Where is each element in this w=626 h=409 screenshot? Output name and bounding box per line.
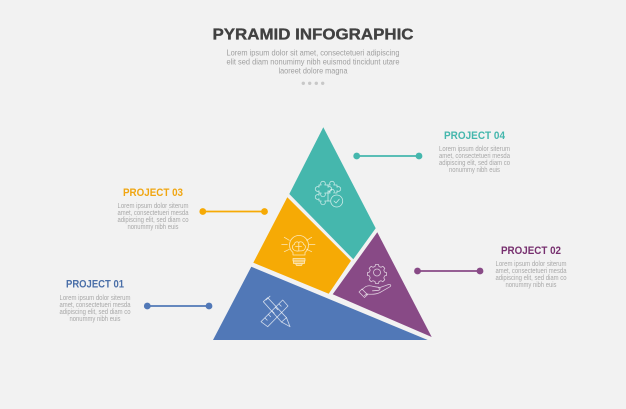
text block: project 03: nonummy nibh euis	[128, 224, 179, 231]
pyramid segment: teal	[289, 127, 376, 259]
text block: project 02	[496, 245, 567, 289]
pyramid segment: purple	[333, 232, 432, 337]
text block: project 04: Lorem ipsum dolor siterum	[439, 146, 510, 153]
text block: project 02: Lorem ipsum dolor siterum	[496, 261, 567, 268]
text block: project 03	[118, 187, 189, 231]
text block: project 03: amet, consectetueri mesda	[118, 210, 189, 217]
text block: project 03: adipiscing elit, sed diam co	[118, 217, 189, 224]
subtitle text: Lorem ipsum dolor sit amet, consectetueri adipiscing	[226, 47, 400, 57]
text block: project 02: amet, consectetueri mesda	[496, 268, 567, 275]
subtitle text: laoreet dolore magna	[278, 65, 348, 75]
connector: project 02	[414, 268, 483, 274]
text block: project 01: adipiscing elit, sed diam co	[60, 309, 131, 316]
text block: project 03: PROJECT 03	[123, 187, 183, 199]
text block: project 01: amet, consectetueri mesda	[60, 302, 131, 309]
icon: puzzle with check	[315, 181, 343, 207]
subtitle text: elit sed diam nonumimy nibh euismod tincidunt utare	[226, 56, 400, 66]
icon: light bulb	[282, 236, 315, 266]
text block: project 02: nonummy nibh euis	[506, 282, 557, 289]
text block: project 04: nonummy nibh euis	[449, 167, 500, 174]
pyramid segment: blue	[213, 267, 428, 340]
text block: project 01: nonummy nibh euis	[70, 316, 121, 323]
text block: project 04: amet, consectetueri mesda	[439, 153, 510, 160]
connector: project 01	[144, 303, 212, 309]
text block: project 04	[439, 130, 510, 174]
text block: project 01: Lorem ipsum dolor siterum	[60, 295, 131, 302]
text block: project 02: PROJECT 02	[501, 245, 561, 257]
connector: project 03	[199, 208, 268, 215]
pyramid segment: amber	[253, 197, 351, 294]
text block: project 02: adipiscing elit, sed diam co	[496, 275, 567, 282]
pagination dots	[302, 82, 324, 85]
text block: project 01	[60, 278, 131, 323]
connector: project 04	[353, 153, 422, 159]
text block: project 04: adipiscing elit, sed diam co	[439, 160, 510, 167]
icon: crossed ruler and pencil	[261, 296, 290, 327]
text block: project 03: Lorem ipsum dolor siterum	[118, 203, 189, 210]
text block: project 04: PROJECT 04	[444, 130, 506, 142]
text block: project 01: PROJECT 01	[66, 278, 124, 290]
icon: gear and hand	[359, 264, 391, 298]
subtitle text	[226, 47, 400, 75]
title: PYRAMID INFOGRAPHIC	[212, 26, 414, 43]
